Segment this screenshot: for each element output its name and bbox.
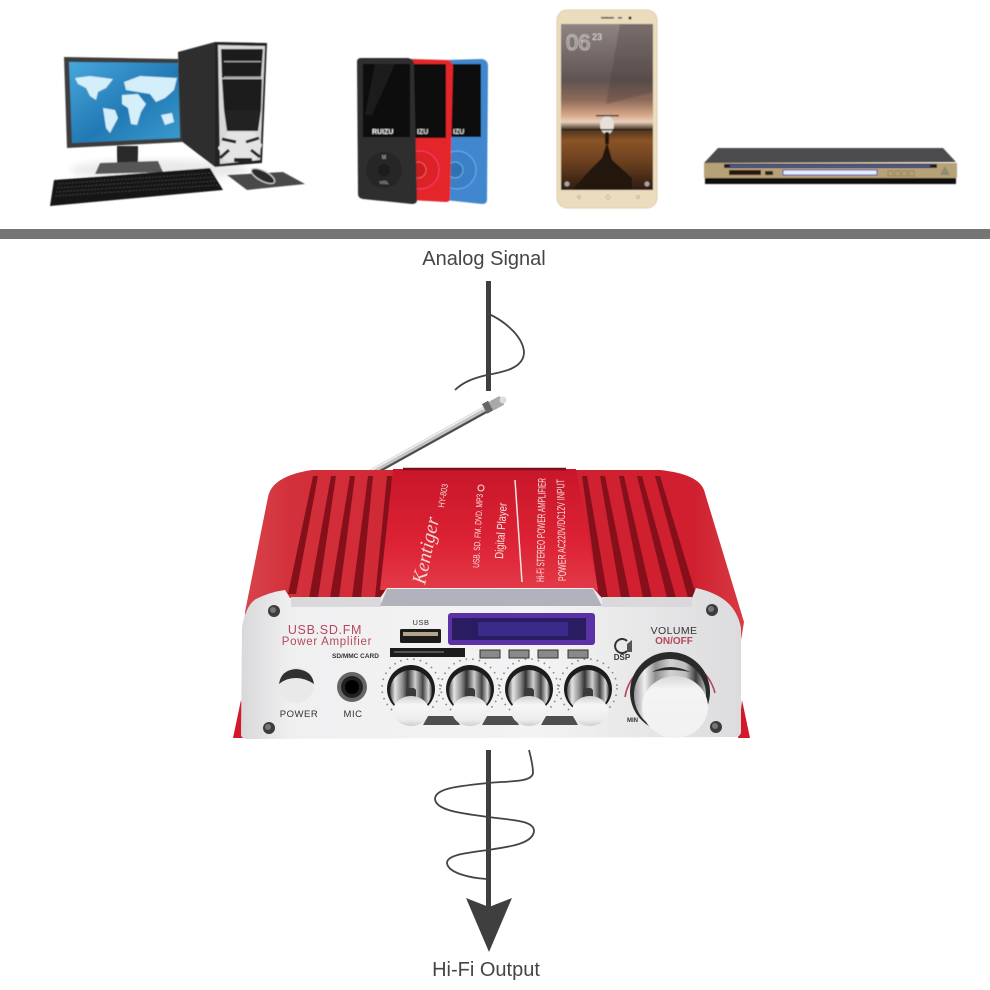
blue player [438,59,488,204]
divider bar [0,229,990,239]
brand label: USB.SD.FM [288,623,362,637]
mic jack [337,672,367,720]
bluetooth icon [478,485,484,491]
phone speaker [601,17,614,19]
cooling fins left [288,476,392,598]
label: hi-fi output: Hi-Fi Output [432,959,540,981]
cooling fins right [582,476,697,598]
DSP logo: DSP [614,653,631,662]
knob dot rings [382,659,617,717]
DSP logo [614,639,632,662]
USB port: USB [413,618,429,627]
SD slot [332,648,465,660]
display window [448,613,595,645]
brand label: Power Amplifier [282,636,372,648]
phone screen icons [564,182,570,186]
black player: M [382,155,386,161]
volume control: MIN [627,718,638,724]
knob 3 [505,665,553,726]
speaker grilles [423,716,578,725]
SD slot: SD/MMC CARD [332,653,379,660]
control buttons [480,650,588,658]
monitor [64,57,182,174]
blue player: IZU [453,129,464,136]
black player [357,58,417,204]
brand label [282,623,372,648]
USB port [400,618,441,643]
red player: IZU [417,129,428,136]
keyboard [50,168,223,206]
heading: analog signal: Analog Signal [422,248,546,270]
volume control: ON/OFF [655,636,693,647]
waveform: hi-fi [435,750,534,879]
knob 1 [387,665,435,726]
model: HY-803 [436,483,450,508]
phone screen [561,24,653,190]
red feet [233,700,248,738]
antenna [368,396,506,476]
screws [263,604,722,734]
MP3 players [357,58,488,204]
home buttons [578,195,640,199]
arrow: input signal line [455,281,524,391]
tower case [178,42,267,167]
volume control: VOLUME [651,625,697,637]
digital player: Digital Player [492,502,510,559]
amplifier [233,396,750,739]
red case [244,470,744,640]
stereo label: Hi-Fi STEREO POWER AMPLIFIER [535,478,549,582]
top panel [380,469,598,590]
knob 2 [446,665,494,726]
mic jack: MIC [344,709,362,720]
waveform: analog [455,314,524,390]
knob 4 [564,665,612,726]
black player: VOL [379,180,389,185]
smartphone: 23 [592,32,602,42]
airplane [562,115,652,190]
arrow: output [435,750,534,952]
desktop computer [50,42,305,206]
world map on screen [75,76,177,133]
power button: POWER [280,709,318,720]
power button [278,667,318,720]
red player [401,59,453,202]
volume control [625,625,715,738]
smartphone [557,10,657,208]
DVD player [704,148,957,184]
front faceplate [241,588,741,739]
brand: Kentiger [408,515,444,587]
power label: POWER AC220V/DC12V INPUT [555,479,569,581]
black player: RUIZU [372,129,393,136]
features: USB. SD. FM. DVD. MP3 [471,494,485,568]
mouse and pad [227,165,305,190]
clock: 06 [566,30,590,55]
